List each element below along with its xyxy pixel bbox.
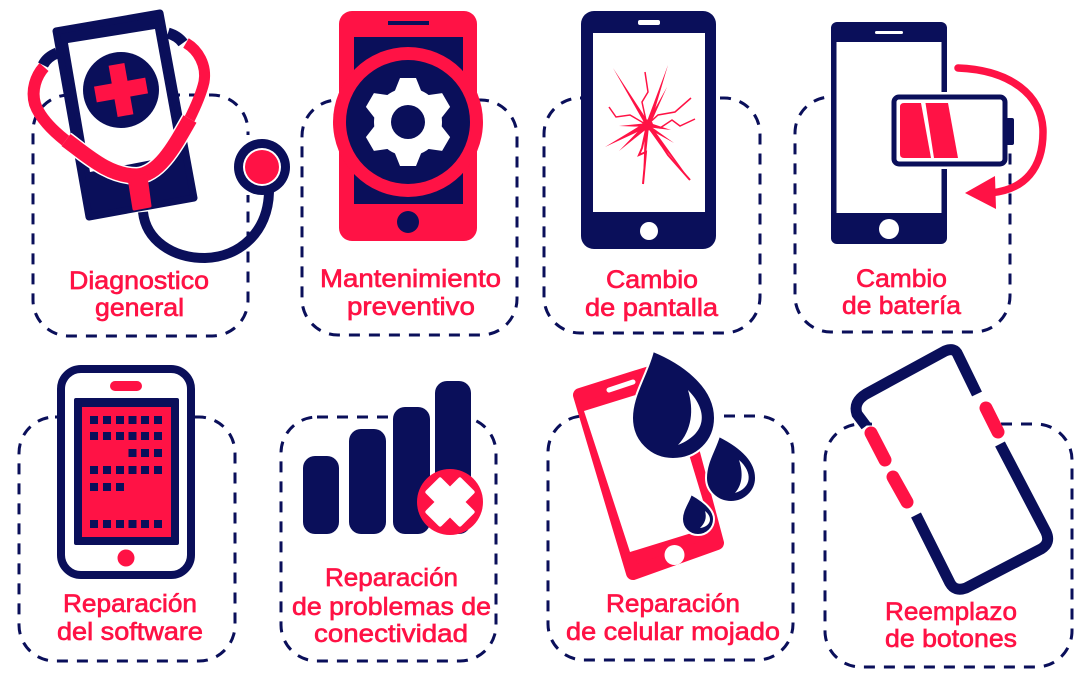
dashed frame <box>19 417 235 661</box>
label: Reparación <box>63 590 197 618</box>
label: Mantenimiento <box>320 265 501 293</box>
label: conectividad <box>314 620 468 648</box>
label: Diagnostico <box>69 267 209 295</box>
dashed frame <box>548 416 793 660</box>
icon: phone with battery and arrow <box>831 22 1047 244</box>
label: Reparación <box>325 564 458 592</box>
icon: phone with gear <box>333 11 483 241</box>
label <box>292 564 491 648</box>
label: Cambio <box>606 266 698 294</box>
dashed frame <box>281 417 496 661</box>
panel: reparacion del software <box>19 369 235 661</box>
dashed frame <box>795 97 1010 332</box>
icon: phone outline with buttons <box>856 350 1050 592</box>
icon: wet phone with drops <box>580 351 756 573</box>
dashed frame <box>825 424 1072 667</box>
panel: reparacion de celular mojado <box>548 351 793 660</box>
icon: signal bars with error mark <box>303 381 485 537</box>
label: general <box>95 294 184 322</box>
label <box>69 267 209 322</box>
label <box>566 590 780 646</box>
panel: cambio de bateria <box>795 22 1047 332</box>
panel: reparacion de problemas de conectividad <box>281 381 496 661</box>
label <box>57 590 203 646</box>
icon: phone with code screen <box>61 369 191 575</box>
panel: mantenimiento preventivo <box>302 11 517 335</box>
label: Reemplazo <box>885 598 1017 626</box>
icon: phone with stethoscope <box>34 13 290 258</box>
label: de celular mojado <box>566 618 780 646</box>
panel: reemplazo de botones <box>825 350 1072 667</box>
label: de pantalla <box>585 294 718 322</box>
label <box>585 266 718 322</box>
label: Reparación <box>606 590 740 618</box>
label <box>842 265 961 320</box>
dashed frame <box>544 98 760 333</box>
label: de batería <box>842 292 961 320</box>
dashed frame <box>33 95 248 336</box>
label <box>885 598 1017 653</box>
label <box>320 265 501 321</box>
label: Cambio <box>856 265 947 293</box>
label: preventivo <box>347 293 475 321</box>
panel: cambio de pantalla <box>544 11 760 333</box>
panel: diagnostico general <box>33 13 290 336</box>
label: de problemas de <box>292 593 491 621</box>
label: de botones <box>885 625 1017 653</box>
dashed frame <box>302 100 517 335</box>
label: del software <box>57 618 203 646</box>
icon: phone with cracked screen <box>581 11 716 249</box>
